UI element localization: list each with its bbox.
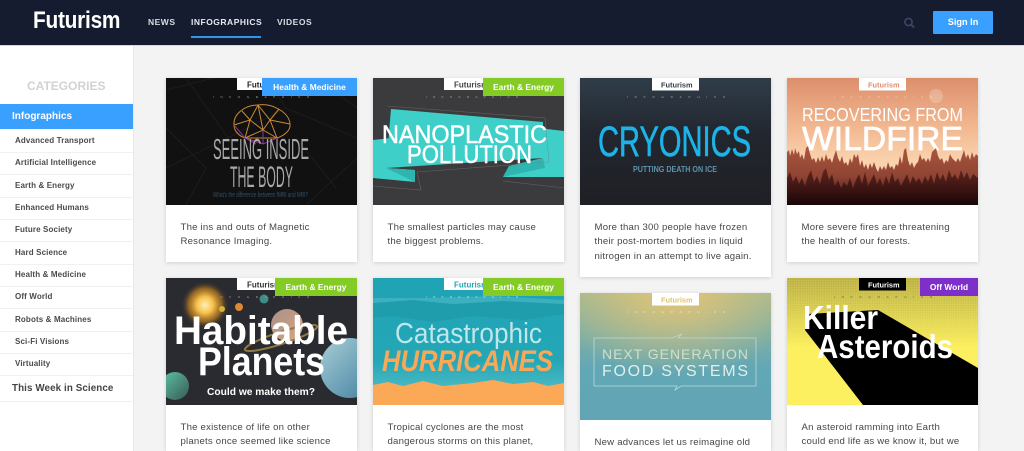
title line 2: POLLUTION xyxy=(407,141,532,169)
infographics label: INFOGRAPHICS xyxy=(213,295,309,299)
active nav underline xyxy=(191,36,261,38)
brain graphic xyxy=(234,105,290,144)
category item: this week in science: This Week in Science xyxy=(12,382,113,394)
card image xyxy=(787,78,978,205)
category item: Earth & Energy xyxy=(15,181,75,190)
description: dangerous storms on this planet, xyxy=(388,436,533,447)
title line 2: WILDFIRE xyxy=(802,120,963,157)
nav link: news: NEWS xyxy=(148,17,176,27)
description xyxy=(388,222,536,247)
infographics label: INFOGRAPHICS xyxy=(834,95,932,99)
infographics label: INFOGRAPHICS xyxy=(627,310,725,314)
category badge xyxy=(483,78,564,96)
description: More severe fires are threatening xyxy=(802,222,950,233)
title line 1: RECOVERING FROM xyxy=(802,105,963,125)
description: the health of our forests. xyxy=(802,236,910,247)
logo tab xyxy=(444,78,504,90)
logo tab xyxy=(652,293,699,306)
subtitle: Could we make them? xyxy=(207,386,315,398)
category item xyxy=(0,309,133,332)
planets xyxy=(161,294,380,400)
title line 1: Habitable xyxy=(174,309,348,353)
category badge: Earth & Energy xyxy=(493,82,554,92)
logo tab xyxy=(237,78,297,90)
card: cryonics xyxy=(580,78,771,277)
logo tab: Futurism xyxy=(247,280,281,290)
description: New advances let us reimagine old xyxy=(594,437,750,448)
logo tab: Futurism xyxy=(661,80,693,90)
nav link: videos: VIDEOS xyxy=(277,17,312,27)
card image xyxy=(787,278,978,405)
title line 1: Catastrophic xyxy=(395,318,542,350)
treeline xyxy=(787,146,978,205)
logo: Futurism xyxy=(33,7,120,34)
logo tab xyxy=(652,78,699,90)
title line 2: Asteroids xyxy=(817,328,953,365)
description: could end life as we know it, but we xyxy=(802,436,959,447)
infographics label: INFOGRAPHICS xyxy=(213,95,309,99)
card image xyxy=(580,293,771,420)
icon: search xyxy=(904,18,914,28)
description: planets once seemed like science xyxy=(180,436,331,447)
infographics label: INFOGRAPHICS xyxy=(426,295,518,299)
category item xyxy=(0,286,133,309)
category item: this week in science xyxy=(0,376,133,402)
description: More than 300 people have frozen xyxy=(594,222,747,233)
description: An asteroid ramming into Earth xyxy=(802,422,940,433)
category item: Enhanced Humans xyxy=(15,203,89,212)
category badge xyxy=(262,78,357,96)
category item: Future Society xyxy=(15,225,72,234)
top navigation bar xyxy=(0,0,1024,46)
description: The smallest particles may cause xyxy=(388,222,536,233)
logo tab xyxy=(859,278,906,290)
card image xyxy=(373,78,564,205)
category badge: Health & Medicine xyxy=(273,82,346,92)
sand xyxy=(373,380,564,405)
card image xyxy=(166,78,357,205)
description: The ins and outs of Magnetic xyxy=(180,222,310,233)
description xyxy=(180,422,331,447)
description: the biggest problems. xyxy=(388,236,484,247)
title line 1: Killer xyxy=(803,299,878,336)
card: next generation food systems xyxy=(580,293,771,451)
description: nitrogen in an attempt to live again. xyxy=(594,251,752,262)
subtitle: PUTTING DEATH ON ICE xyxy=(633,164,717,174)
logo tab: Futurism xyxy=(247,80,281,90)
active category xyxy=(0,104,133,129)
card: catastrophic hurricanes xyxy=(373,278,564,451)
infographics label: INFOGRAPHICS xyxy=(834,295,932,299)
title line 2: FOOD SYSTEMS xyxy=(602,363,748,380)
description xyxy=(388,422,533,447)
moon xyxy=(929,89,943,103)
description: Resonance Imaging. xyxy=(180,236,272,247)
title frame xyxy=(594,334,756,390)
card image xyxy=(166,278,357,405)
description: The existence of life on other xyxy=(180,422,310,433)
active category: Infographics xyxy=(12,111,72,122)
long black shadow xyxy=(805,310,978,405)
category badge: Earth & Energy xyxy=(286,282,346,292)
category item xyxy=(0,197,133,220)
category item xyxy=(0,264,133,287)
title line 1: NEXT GENERATION xyxy=(602,346,748,362)
category item: Health & Medicine xyxy=(15,270,86,279)
card: habitable planets xyxy=(166,278,357,451)
category item xyxy=(0,130,133,153)
logo tab: Futurism xyxy=(454,80,488,90)
category item xyxy=(0,353,133,376)
category item xyxy=(0,175,133,198)
category item: Virtuality xyxy=(15,359,50,368)
card: seeing inside the body xyxy=(166,78,357,262)
sidebar heading: CATEGORIES xyxy=(27,79,105,93)
category item: Off World xyxy=(15,292,52,301)
logo tab xyxy=(444,278,504,290)
category badge xyxy=(483,278,564,296)
description: their post-mortem bodies in liquid xyxy=(594,236,743,247)
category item: Artificial Intelligence xyxy=(15,158,96,167)
logo tab: Futurism xyxy=(868,280,900,290)
infographics label: INFOGRAPHICS xyxy=(426,95,518,99)
card: nanoplastic pollution xyxy=(373,78,564,262)
category item xyxy=(0,242,133,265)
description xyxy=(594,222,752,262)
category item xyxy=(0,331,133,354)
category item xyxy=(0,219,133,242)
card image xyxy=(373,278,564,405)
category item: Sci-Fi Visions xyxy=(15,337,69,346)
sidebar: categories xyxy=(0,46,134,451)
ribbon banner xyxy=(373,106,564,190)
card: killer asteroids xyxy=(787,278,978,451)
card image xyxy=(580,78,771,205)
logo tab: Futurism xyxy=(661,296,693,304)
category item: Advanced Transport xyxy=(15,136,95,145)
card: recovering from wildfire xyxy=(787,78,978,262)
category item xyxy=(0,152,133,175)
description xyxy=(180,222,310,247)
nav link: infographics: INFOGRAPHICS xyxy=(191,17,262,27)
logo tab xyxy=(237,278,297,290)
category badge: Off World xyxy=(930,282,968,292)
sign in button: Sign In xyxy=(948,17,978,27)
cloud bands xyxy=(373,296,564,322)
logo tab xyxy=(859,78,906,90)
description xyxy=(802,222,950,247)
logo tab: Futurism xyxy=(454,280,488,290)
sun xyxy=(181,281,229,329)
title line 2: Planets xyxy=(198,340,325,384)
description xyxy=(802,422,959,447)
sign in button xyxy=(933,11,993,34)
title line 1: NANOPLASTIC xyxy=(382,121,547,149)
logo tab: Futurism xyxy=(868,80,900,90)
category badge: Earth & Energy xyxy=(493,282,554,292)
category badge xyxy=(275,278,357,296)
description: Tropical cyclones are the most xyxy=(388,422,524,433)
category item: Robots & Machines xyxy=(15,315,91,324)
category badge xyxy=(920,278,978,296)
infographics label: INFOGRAPHICS xyxy=(627,95,725,99)
category item: Hard Science xyxy=(15,248,67,257)
